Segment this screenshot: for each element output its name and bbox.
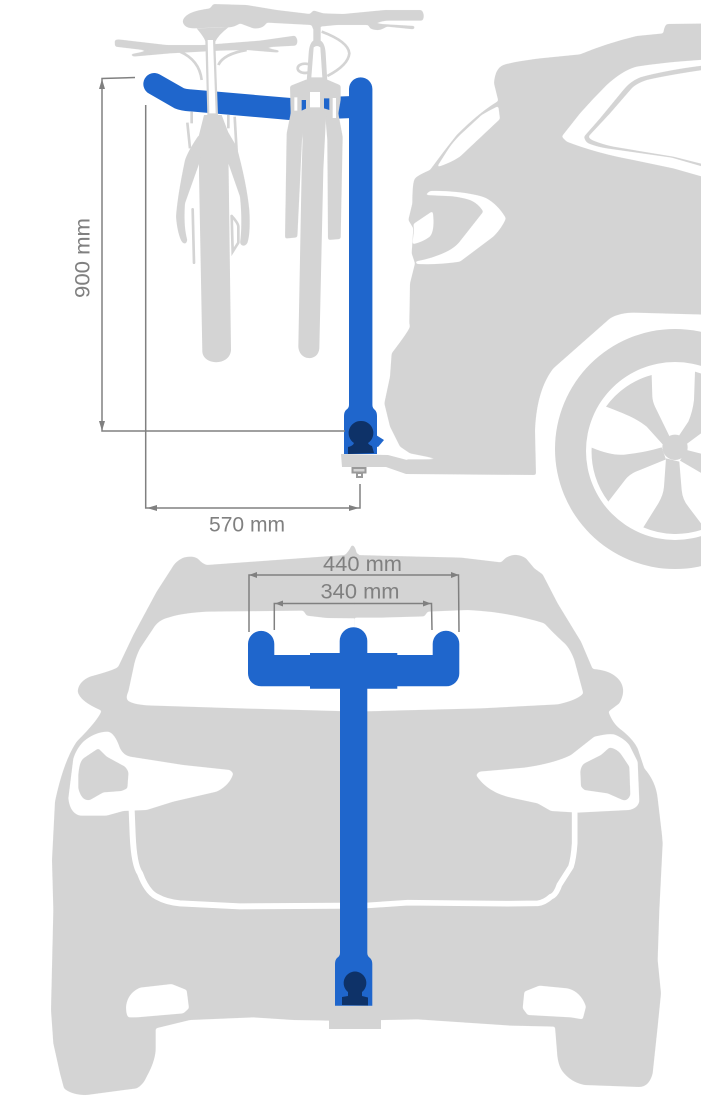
900 mm label: 900 mm	[72, 218, 94, 298]
rear rack	[248, 627, 459, 1006]
side view wheel	[555, 329, 701, 569]
trunk seam	[132, 810, 360, 906]
dimension 570 mm	[146, 105, 360, 536]
tow bar arm	[341, 454, 441, 474]
blue post and mount	[344, 77, 377, 454]
bumper reflector	[126, 984, 189, 1017]
tyre	[555, 329, 701, 569]
dark hitch ball side	[348, 421, 374, 454]
340 mm label: 340 mm	[320, 580, 400, 604]
rear glass sliver	[437, 106, 500, 167]
900 mm arrowheads	[99, 79, 105, 431]
rear window right half	[354, 610, 583, 712]
rear window left half	[127, 611, 360, 712]
570 mm lines	[146, 105, 360, 508]
440 mm arrowheads	[249, 572, 459, 578]
dimension 440 mm	[249, 553, 459, 632]
right bike fork arm	[226, 128, 250, 246]
rear tow bar block	[329, 1000, 381, 1029]
dimension 900 mm	[72, 78, 345, 431]
left bike tyre	[199, 115, 231, 362]
side view car	[384, 23, 701, 569]
right trunk seam	[354, 812, 575, 906]
340 mm lines	[274, 604, 432, 630]
rear car right half	[354, 555, 663, 1087]
right tail light lens	[580, 748, 630, 800]
left bike brake detail	[193, 209, 238, 263]
blue T frame	[248, 627, 459, 1006]
rear car left half	[51, 545, 360, 1095]
brake cable loop	[180, 32, 349, 152]
lower handlebar	[115, 36, 297, 57]
tail light lens	[78, 748, 129, 800]
car body side silhouette	[384, 23, 701, 475]
440 mm lines	[249, 575, 459, 632]
dimension 340 mm	[274, 580, 432, 630]
side window outer band	[562, 59, 701, 182]
left bike fork arm	[176, 133, 202, 244]
dark hitch ball rear	[342, 972, 368, 1006]
wheel spokes	[592, 372, 701, 534]
blue rack crossbar side view	[154, 84, 353, 109]
tail light lens	[412, 211, 434, 244]
570 mm arrowheads	[147, 505, 359, 511]
crown openings showing the bar	[302, 100, 306, 111]
340 mm arrowheads	[275, 600, 431, 606]
tail light white surround	[68, 732, 233, 816]
rear view car	[51, 545, 663, 1095]
440 mm label: 440 mm	[323, 553, 402, 576]
side window glass	[588, 68, 701, 168]
900 mm lines	[102, 78, 345, 431]
bicycles	[115, 4, 424, 362]
rim gap	[586, 362, 701, 540]
570 mm label: 570 mm	[209, 514, 285, 536]
right bike tyre	[298, 106, 326, 358]
blue latch tab	[375, 435, 384, 447]
right tail light surround	[476, 734, 639, 813]
right bike stem opening	[311, 46, 322, 77]
right bike crown and fork legs	[285, 79, 343, 240]
right bumper reflector	[523, 986, 586, 1019]
left bike stem	[197, 27, 228, 115]
side rack post	[341, 77, 441, 477]
tow bar bolt	[352, 468, 366, 477]
right bike stem	[307, 25, 327, 82]
upper handlebar	[183, 4, 424, 30]
tail light outline	[415, 191, 506, 264]
